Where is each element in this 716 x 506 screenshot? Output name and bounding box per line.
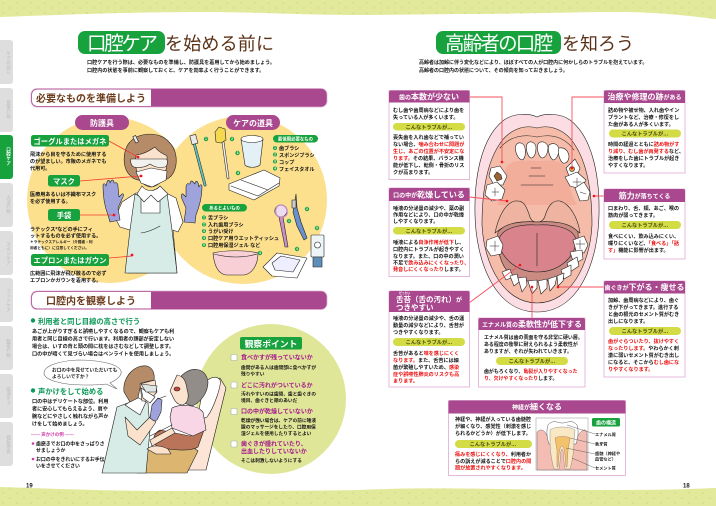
panel: treatment marks: た歯がある人が多くいます。 — [608, 121, 674, 128]
panel: fewer teeth: クが高まります。 — [393, 169, 433, 176]
panel: treatment marks: こんなトラブルが… — [622, 130, 668, 138]
panel: thinner nerves: こんなトラブルが… — [470, 440, 516, 448]
list: essentials: 最低限必要なもの — [278, 136, 314, 142]
tool number markers: 3 — [237, 151, 239, 155]
panel: muscle weakness: 喋りにくいなど、「食べる」「話 — [608, 240, 679, 247]
side tabs: 排泄ケア — [6, 386, 12, 407]
panel: enamel: エナメル質は歯の表面を守る非常に硬い層。 — [484, 334, 583, 341]
panel: muscle weakness: 筋肉が弱ってきます。 — [608, 212, 658, 219]
item: apron: エプロンまたはガウン — [34, 256, 106, 265]
title: right page: を知ろう — [562, 34, 634, 54]
list: essentials: 2 — [274, 153, 276, 157]
list: nice to have: 口腔ケア用ウエットティッシュ — [208, 235, 279, 242]
item: apron: エプロンかガウンを着用する。 — [30, 277, 101, 284]
panel: muscle weakness: 口まわり、舌、頬、あご、喉の — [608, 205, 679, 212]
panel: fewer teeth: ない場合、噛み合わせに問題が — [393, 141, 464, 148]
item: gloves: ットするものを必ず使用する。 — [30, 232, 101, 240]
panel: dry mouth: 発音しにくくなったりします。 — [393, 266, 464, 273]
tool number markers: 2 — [306, 207, 308, 211]
panel: treatment marks: 治療や修理の跡がある — [607, 92, 682, 102]
list: nice to have: 口腔用保湿ジェル など — [208, 242, 261, 249]
panel: observation points: 歯ぐきが腫れていたり、 — [241, 440, 307, 448]
page number 18: 18 — [683, 484, 690, 490]
text block: example phrases: せましょうか — [36, 447, 65, 454]
text block: example phrases: いをさせてください — [36, 462, 80, 470]
panel: fewer teeth: 能が低下し、転倒・骨折のリス — [393, 162, 464, 169]
panel: observation points: 乾燥が強い場合は、ケアの前に唾液 — [241, 417, 316, 424]
item: goggles — [30, 135, 109, 172]
panel: tongue coating — [389, 291, 470, 387]
list: essentials: スポンジブラシ — [279, 152, 315, 159]
panel: dry mouth: しやすくなります。 — [393, 218, 438, 225]
panel: observation points: 口の中が乾燥していないか — [241, 408, 313, 416]
text block: speak first: 口の中はデリケートな部位。利用 — [32, 398, 108, 405]
section bar: observe: 口腔内を観察しよう — [46, 294, 136, 308]
panel: thinner nerves: 題が放置されやすくなります。 — [455, 464, 526, 472]
illustration: care scene — [102, 366, 226, 473]
text block: example phrases — [31, 431, 105, 470]
text block: eye level: 場合は、いすの背と頭の間に枕をはさむなどして調整します。 — [32, 343, 174, 350]
panel: observation points: 観察ポイント — [245, 338, 297, 349]
side tabs: ケアの前に — [6, 50, 12, 74]
text block: speak first: 腕などにやさしく触れながら声か — [32, 413, 108, 420]
panel: treatment marks: 治療をした歯にトラブルが起き — [608, 155, 679, 162]
panel: receding gums: 出しになります。 — [608, 318, 648, 325]
text block: example phrases: お口の中をきれいにするお手伝 — [36, 456, 105, 463]
panel: enamel: ありますが、それが失われていきます。 — [484, 348, 572, 355]
title: left page: を始める前に — [165, 34, 274, 54]
item: mask: 医療用あるいは不織布マスク — [30, 191, 96, 198]
illustration: care tools — [190, 127, 324, 278]
tool number markers: 4 — [237, 171, 239, 175]
side tabs: フットケア — [6, 289, 12, 313]
text block: speak first: 声かけをして始める — [38, 387, 103, 396]
list: nice to have: 舌ブラシ — [208, 214, 228, 222]
panel: tongue coating: まります。 — [393, 378, 418, 384]
panel: treatment marks: プラントなど、治療・修復をし — [608, 114, 679, 121]
panel: tongue coating: こんなトラブルが… — [406, 338, 452, 346]
title: left page: 口腔ケア — [87, 33, 158, 55]
text block: eye level — [31, 317, 174, 358]
list: nice to have: 5 — [203, 243, 205, 247]
panel: tongue coating: ぜったい — [399, 291, 410, 295]
panel: muscle weakness — [604, 189, 685, 259]
panel: observation points: そこは刺激しないようにする — [241, 457, 302, 464]
item: apron — [30, 254, 109, 284]
legend: tooth structure: エナメル質 — [595, 431, 616, 438]
side tabs: 食事介助 — [6, 99, 12, 120]
list: nice to have: 3 — [203, 229, 205, 233]
illustration: open mouth — [475, 114, 599, 312]
panel: dry mouth: 唾液による自浄作用が低下し、 — [393, 239, 464, 246]
panel: dry mouth: 作用などにより、口の中が乾燥 — [393, 212, 465, 218]
text block: speak first: けをして始めましょう。 — [32, 420, 88, 428]
item: goggles: 飛沫から目を守るために使用する — [30, 151, 106, 158]
side tabs — [0, 40, 13, 466]
panel: tongue coating: なります。また、舌苔には細 — [393, 357, 459, 364]
list: essentials — [273, 135, 318, 173]
side tabs: 福祉用具 — [6, 434, 12, 455]
panel: thinner nerves: 神経が細くなる — [512, 402, 562, 412]
legend: tooth structure: 歯髄（神経や — [595, 450, 620, 457]
panel: fewer teeth: むし歯や歯周病などにより歯を — [393, 107, 464, 114]
panel: observation points: どこに汚れがついているか — [241, 382, 313, 390]
text block: eye level: 利用者と同じ目線の高さで行う — [38, 317, 140, 326]
tool number markers: 5 — [316, 226, 318, 230]
list: essentials: フェイスタオル — [279, 166, 315, 173]
panel: treatment marks: り減り、むし歯が再発するなど、 — [608, 148, 684, 155]
panel: treatment marks: 時間の経過とともに詰め物がす — [608, 141, 679, 148]
pill: care tools: ケアの道具 — [233, 118, 273, 128]
list: essentials: 歯ブラシ — [279, 145, 299, 152]
panel: fewer teeth — [389, 90, 470, 180]
section bar: prepare: 必要なものを準備しよう — [36, 92, 146, 105]
legend: tooth structure: 歯の構造 — [596, 420, 616, 426]
legend: tooth structure: セメント質 — [595, 464, 616, 472]
panel: thinner nerves: が細くなり、感覚性（刺激を感じ — [455, 423, 531, 430]
item: gloves — [30, 209, 101, 250]
pointer lines: protective gear — [80, 141, 142, 258]
panel: receding gums: きが下がってきます。進行する — [608, 304, 678, 311]
side tabs: 口腔ケア — [6, 147, 12, 167]
panel: receding gums: こんなトラブルが… — [622, 327, 668, 335]
panel: receding gums: になると、そこからむし歯にな — [608, 359, 679, 366]
chart: tooth structure — [536, 418, 595, 470]
panel: muscle weakness: す」機能に影響が出ます。 — [608, 247, 669, 254]
panel: observation points: 腺のマッサージをしたり、口腔用保 — [241, 424, 316, 430]
list: nice to have: あるとよいもの — [209, 204, 240, 212]
side tabs: 入浴介助 — [6, 195, 12, 215]
intro text: right page: 高齢者は加齢に伴う変化などにより、ほぼすべての人が口腔内に何かしらのトラブルを抱えています。 — [419, 59, 647, 66]
illustration: nurse — [103, 134, 202, 273]
list: nice to have: 入れ歯用ブラシ — [208, 222, 244, 228]
text block: speak first: 者に安心してもらえるよう、肩や — [32, 406, 108, 412]
text block: eye level: 用者と同じ目線の高さで行います。利用者の頭部が安定しない — [32, 336, 174, 342]
panel: tongue coating: 舌苔があると味を感じにくく — [393, 350, 459, 357]
panel: thinner nerves: られるかどうか）が低下します。 — [455, 430, 531, 437]
speech bubble: お口の中を見せていただいても — [52, 366, 118, 374]
panel: dry mouth — [389, 188, 470, 276]
panel: enamel: ある程度の衝撃に耐えられるよう柔軟性が — [484, 341, 578, 348]
panel: fewer teeth: 失っている人が多くいます。 — [393, 114, 458, 121]
panel: tongue coating: 動量の減少などにより、舌苔が — [393, 322, 464, 329]
panel: receding gums: 歯ぐきが下がる・痩せる — [604, 282, 685, 292]
section bar: prepare — [31, 88, 327, 107]
list: nice to have: 1 — [203, 216, 205, 220]
panel: fewer teeth: こんなトラブルが… — [406, 123, 452, 131]
speech bubble — [44, 360, 121, 389]
list: nice to have: 4 — [203, 236, 205, 240]
tool number markers: 3 — [259, 251, 261, 255]
title: right page — [436, 31, 634, 55]
panel: receding gums: なったりします。やわらかく刺 — [608, 345, 679, 352]
item: mask — [30, 175, 96, 205]
text block: example phrases: 歯磨きでお口の中をさっぱりさ — [36, 440, 105, 448]
panel: observation points: 汚れやすいのは歯間、歯と歯ぐきの — [241, 390, 316, 398]
tool number markers: 1 — [205, 137, 207, 141]
item: apron: 広範囲に飛沫が飛び散るので必ず — [30, 270, 106, 277]
top decorative band — [0, 0, 716, 19]
list: essentials: 1 — [274, 146, 276, 150]
tool number markers: 1 — [288, 219, 290, 223]
intro text: left page: 口腔ケアを行う際は、必要なものを準備し、防護具を着用してから始めましょう。 — [87, 59, 275, 66]
panel: observation points: 出血したりしていないか — [241, 448, 307, 456]
text block: eye level: あごが上がりすぎると誤嚥しやすくなるので、観察もケアも利 — [32, 328, 174, 335]
panel: thinner nerves: らの訴えが減ることで口腔内の問 — [455, 458, 531, 465]
text block: eye level: 口の中が暗くて見づらい場合はペンライトを使用しましょう。 — [32, 350, 174, 358]
panel: observation points: 歯間がある人は歯間部に食べかすが — [241, 364, 316, 371]
panel: receding gums: りやすくなります。 — [608, 366, 653, 373]
panel: tongue coating: つきやすい — [396, 302, 434, 312]
panel: enamel: エナメル質の柔軟性が低下する — [482, 319, 582, 329]
side tabs: 服薬介助 — [6, 338, 12, 359]
panel: dry mouth: 不足で飲み込みにくくなったり、 — [393, 260, 469, 266]
panel: muscle weakness: 筋力が落ちてくる — [619, 190, 670, 200]
panel: tongue coating: 唾液の分泌量の減少や、舌の運 — [393, 315, 464, 322]
panel: receding gums: 加齢、歯周病などにより、歯ぐ — [608, 297, 679, 304]
yellow background circles — [27, 116, 327, 284]
green circle: observation points background — [196, 324, 346, 474]
item: goggles: 代用可。 — [30, 166, 50, 172]
panel: fewer teeth: ります。その結果、バランス機 — [393, 155, 465, 162]
panel: receding gums: 激に弱いセメント質がむき出し — [608, 352, 679, 359]
legend: tooth structure — [592, 418, 620, 472]
panel: fewer teeth: 生じ、あごの位置が不安定にな — [393, 148, 464, 155]
panel: fewer teeth: 喪失歯を入れ歯などで補ってい — [393, 134, 464, 141]
panel: observation points: 湿ジェルを使用したりするとよい — [241, 430, 312, 437]
page number 19: 19 — [26, 484, 33, 490]
intro text: right page: 高齢者の口腔内の状態について、その傾向を知っておきましょう。 — [419, 67, 568, 74]
item: goggles: ゴーグルまたはメガネ — [34, 137, 106, 146]
section bar: observe — [31, 291, 327, 310]
item: gloves: 手袋 — [57, 211, 72, 220]
bottom decorative band — [0, 487, 716, 506]
panel: receding gums: と歯の根元のセメント質がむき — [608, 311, 679, 318]
panel: thinner nerves: 神経や、神経が入っている歯髄腔 — [455, 416, 531, 423]
item: gloves: ＊ラテックスアレルギー（介護者・利 — [30, 239, 93, 244]
title: left page — [78, 31, 274, 55]
list: nice to have — [202, 204, 279, 249]
panel: dry mouth: 口腔内にトラブルが起きやすく — [393, 246, 464, 253]
panel: enamel: り、欠けやすくなったりします。 — [484, 375, 557, 382]
panel: enamel — [478, 318, 585, 387]
panel: thinner nerves — [448, 400, 626, 476]
panel: receding gums: 歯がぐらついたり、抜けやすく — [608, 338, 679, 345]
panel: dry mouth: 口の中が乾燥している — [393, 190, 465, 200]
pill: protective gear: 防護具 — [90, 118, 114, 128]
pointer lines: mouth — [469, 97, 604, 318]
panel: muscle weakness: こんなトラブルが… — [622, 221, 668, 229]
item: mask: マスク — [53, 177, 75, 186]
list: essentials: 3 — [274, 160, 276, 164]
panel: receding gums — [604, 281, 685, 377]
intro text: left page: 口腔内の状態を事前に観察しておくと、ケアを効率よく行うことができます。 — [87, 67, 264, 74]
panel: dry mouth: なります。また、口の中の潤い — [393, 253, 464, 260]
panel: dry mouth: 唾液の分泌量の減少や、薬の副 — [393, 205, 464, 212]
item: gloves: 用者ともに）に注意してください。 — [30, 245, 89, 250]
tool number markers — [204, 137, 319, 255]
panel: observation points — [231, 337, 316, 464]
panel: tongue coating: 舌苔（舌の汚れ）が — [396, 294, 462, 304]
list: essentials: コップ — [279, 159, 294, 166]
panel: enamel: こんなトラブルが… — [509, 357, 555, 365]
panel: treatment marks — [604, 90, 685, 173]
text block: example phrases: ------ 声かけの例 ------ — [31, 431, 74, 438]
list: nice to have: うがい受け — [208, 228, 233, 235]
speech bubble: よろしいですか？ — [52, 373, 89, 380]
pill: protective gear — [75, 115, 129, 130]
panel: fewer teeth: 歯の本数が少ない — [399, 92, 459, 102]
panel: treatment marks: やすくなります。 — [608, 162, 648, 169]
item: mask: を必ず使用する。 — [30, 198, 71, 205]
intro text: left page — [87, 59, 275, 74]
panel: tongue coating: 菌が繁殖しやすいため、感染 — [393, 364, 459, 371]
panel: observation points: 残りやすい — [241, 370, 265, 378]
panel: tongue coating: つきやすくなります。 — [393, 329, 443, 336]
panel: observation points: 境目、歯ぐきと頬のあいだ — [241, 397, 298, 404]
legend: tooth structure: 象牙質 — [595, 440, 608, 448]
item: goggles: のが望ましい。市販のメガネでも — [30, 158, 106, 165]
panel: thinner nerves: 痛みを感じにくくなり、利用者か — [455, 451, 531, 458]
panel: muscle weakness: 食べにくい、飲み込みにくい、 — [608, 233, 679, 240]
text block: speak first — [31, 387, 108, 428]
panel: observation points: 食べかすが残っていないか — [241, 354, 313, 362]
item: gloves: ラテックス*などの手にフィ — [30, 226, 93, 233]
side tabs: スキンケア — [6, 242, 12, 266]
tool number markers: 4 — [296, 247, 298, 251]
panel: tongue coating: 症や誤嚥性肺炎のリスクも高 — [393, 371, 459, 378]
intro text: right page — [419, 59, 647, 74]
panel: treatment marks: 詰め物や被せ物、入れ歯やイン — [608, 107, 679, 114]
list: nice to have: 2 — [203, 223, 205, 227]
panel: enamel: 歯がもろくなり、亀裂が入りやすくなった — [484, 368, 578, 375]
title: right page: 高齢者の口腔 — [445, 33, 553, 55]
legend: tooth structure: 血管など） — [595, 456, 616, 462]
panel: dry mouth: こんなトラブルが… — [406, 227, 452, 235]
list: essentials: 4 — [274, 167, 276, 171]
tool number markers: 2 — [231, 137, 233, 141]
pill: care tools — [226, 115, 280, 130]
